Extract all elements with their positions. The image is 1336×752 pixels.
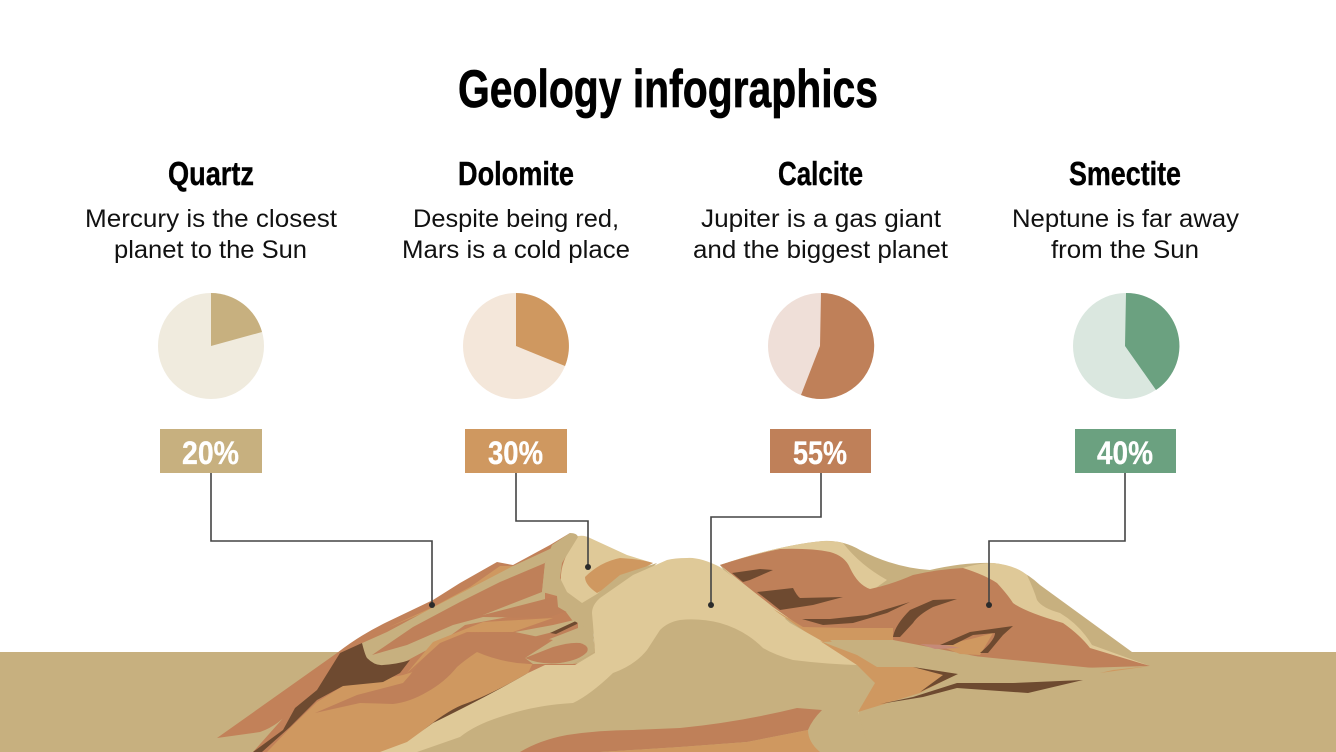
panel: calcite bbox=[693, 155, 948, 473]
value badge: 20%: 20% bbox=[182, 435, 239, 471]
front mountain bbox=[380, 558, 875, 752]
value badge: 55%: 55% bbox=[793, 435, 847, 471]
description: calcite: and the biggest planet bbox=[693, 236, 948, 264]
ground bbox=[0, 652, 1336, 752]
title: Geology infographics bbox=[458, 60, 878, 119]
description: calcite bbox=[693, 205, 948, 264]
panel: quartz bbox=[85, 155, 337, 473]
description: quartz: Mercury is the closest bbox=[85, 205, 337, 233]
connector: dolomite bbox=[516, 473, 591, 570]
peak bbox=[542, 533, 657, 664]
description: calcite: Jupiter is a gas giant bbox=[701, 205, 941, 233]
heading: calcite: Calcite bbox=[778, 155, 863, 192]
value badge: 20% bbox=[160, 429, 262, 473]
pie chart: 20% bbox=[158, 293, 264, 399]
value badge: 55% bbox=[770, 429, 871, 473]
description: smectite: from the Sun bbox=[1051, 236, 1199, 264]
description: smectite bbox=[1012, 205, 1240, 264]
panel: smectite bbox=[1012, 155, 1240, 473]
description: quartz bbox=[85, 205, 337, 264]
pie chart: 55% bbox=[768, 293, 874, 399]
description: quartz: planet to the Sun bbox=[114, 236, 307, 264]
description: smectite: Neptune is far away bbox=[1012, 205, 1240, 233]
description: dolomite: Mars is a cold place bbox=[402, 236, 630, 264]
connector: smectite bbox=[986, 473, 1125, 608]
connector: quartz bbox=[211, 473, 435, 608]
heading: quartz: Quartz bbox=[168, 155, 254, 192]
left rock face bbox=[217, 533, 640, 752]
heading: smectite: Smectite bbox=[1069, 155, 1181, 192]
value badge: 30% bbox=[465, 429, 567, 473]
front right ledge bbox=[820, 640, 1150, 712]
connector: calcite bbox=[708, 473, 821, 608]
heading: dolomite: Dolomite bbox=[458, 155, 574, 192]
back right range bbox=[720, 541, 1150, 680]
pie chart: 30% bbox=[463, 293, 569, 399]
panel: dolomite bbox=[402, 155, 630, 473]
description: dolomite: Despite being red, bbox=[413, 205, 619, 233]
value badge: 40%: 40% bbox=[1097, 435, 1153, 471]
value badge: 40% bbox=[1075, 429, 1176, 473]
pie chart: 40% bbox=[1073, 293, 1179, 399]
value badge: 30%: 30% bbox=[488, 435, 543, 471]
illustration: mountains bbox=[217, 533, 1150, 752]
description: dolomite bbox=[402, 205, 630, 264]
